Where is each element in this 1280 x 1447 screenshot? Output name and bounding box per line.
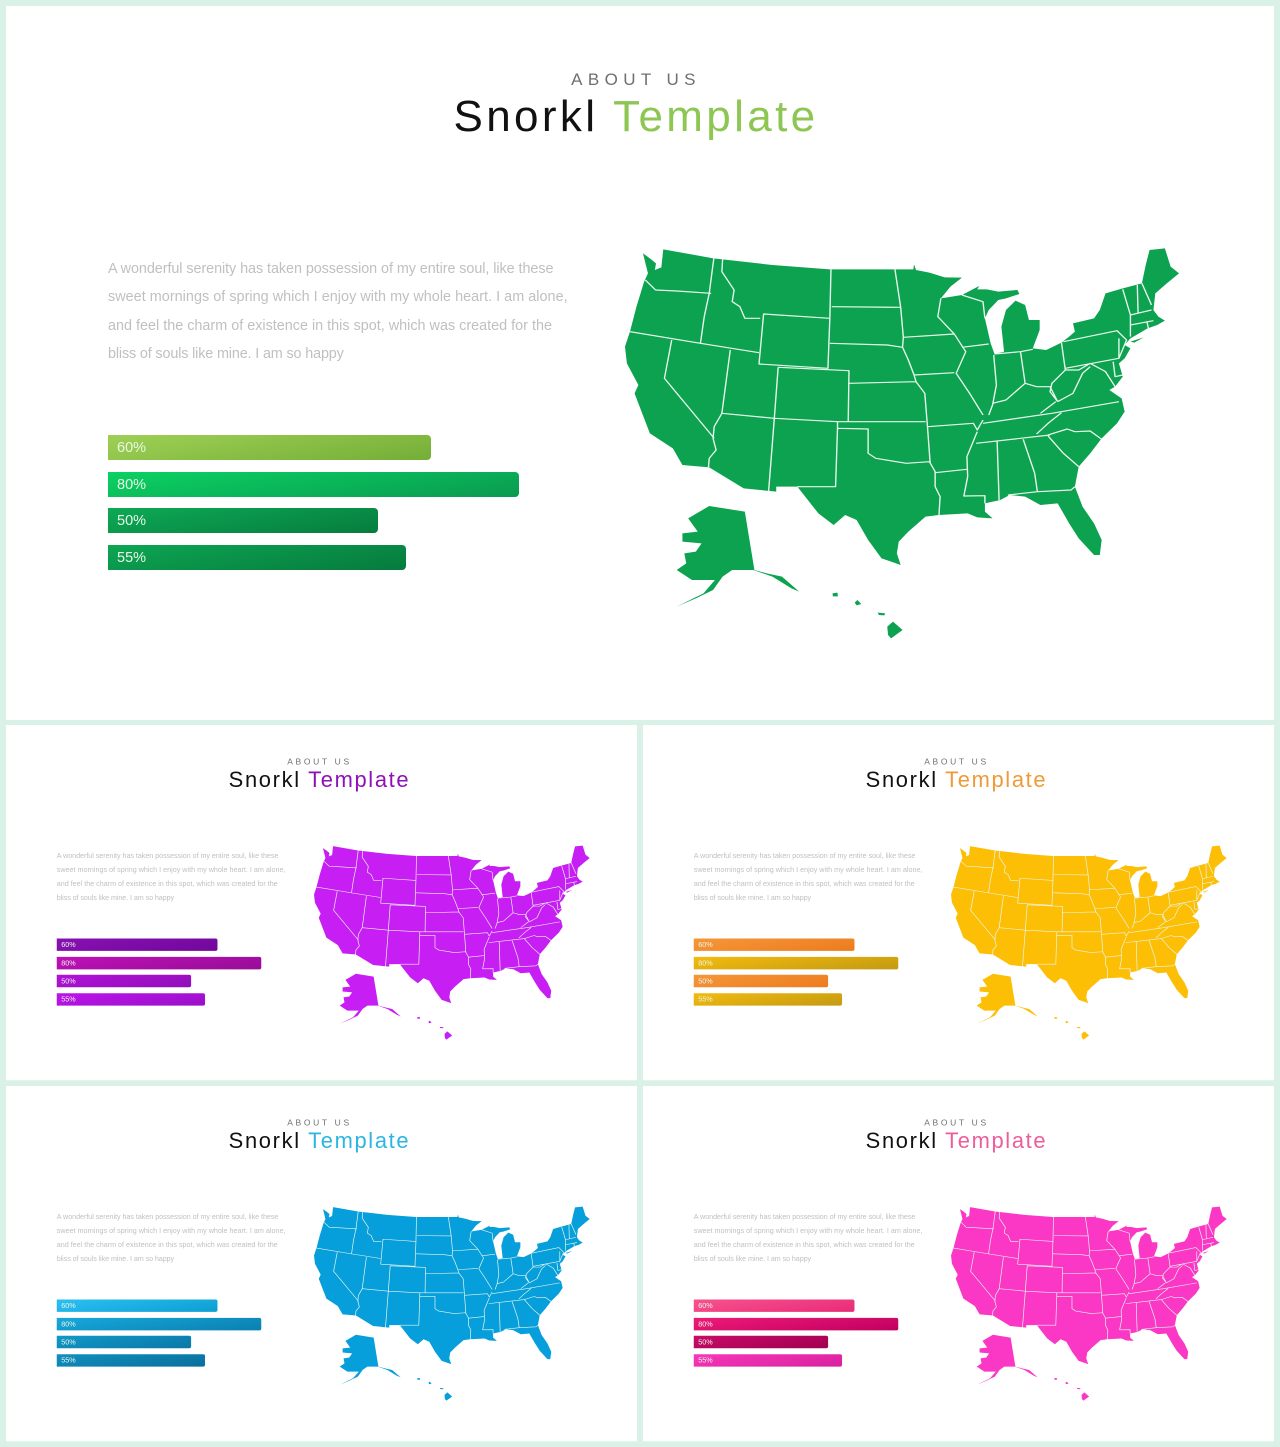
heading: pink slide: ABOUT US	[924, 1118, 989, 1127]
bar chart: blue slide: 50%	[61, 1338, 76, 1346]
map: amber USA	[951, 846, 1227, 1040]
map: purple USA	[314, 846, 590, 1040]
text block: green slide: and feel the charm of existence in this spot, which was created for the	[108, 318, 552, 334]
text block: amber slide: sweet mornings of spring which I enjoy with my whole heart. I am alone,	[694, 866, 922, 874]
bar chart: amber slide: 60%	[698, 941, 713, 949]
bar chart: purple slide: 55%	[61, 996, 76, 1004]
heading: purple slide: ABOUT US	[287, 757, 352, 766]
bar chart: pink slide: 50%	[698, 1338, 713, 1346]
panel: main green slide	[6, 6, 1274, 720]
bar chart: blue slide: 80%	[61, 1320, 76, 1328]
heading: green slide: ABOUT US	[571, 70, 701, 89]
text block: blue slide: and feel the charm of existence in this spot, which was created for the	[57, 1241, 278, 1249]
text block: purple slide: A wonderful serenity has taken possession of my entire soul, like these	[57, 852, 278, 860]
bar chart: purple slide: 80%	[61, 959, 76, 967]
bar chart: green slide: 80%	[117, 477, 146, 493]
heading: amber slide: Snorkl Template	[866, 768, 1047, 792]
text block: pink slide: A wonderful serenity has taken possession of my entire soul, like these	[694, 1213, 915, 1221]
bar chart: amber slide: 80%	[698, 959, 713, 967]
bar chart: purple slide	[56, 938, 262, 1006]
bar chart: pink slide	[694, 1300, 898, 1367]
map: blue USA	[314, 1206, 590, 1401]
text block: pink slide: bliss of souls like mine. I am so happy	[694, 1255, 811, 1263]
heading: amber slide: ABOUT US	[924, 757, 989, 766]
heading: blue slide: Snorkl Template	[229, 1129, 410, 1153]
map: green USA	[625, 248, 1179, 638]
text block: pink slide: sweet mornings of spring which I enjoy with my whole heart. I am alone,	[694, 1227, 922, 1235]
bar chart: pink slide: 60%	[698, 1302, 713, 1310]
text block: green slide: sweet mornings of spring which I enjoy with my whole heart. I am alone,	[108, 289, 568, 305]
text block: amber slide: and feel the charm of existence in this spot, which was created for the	[694, 880, 915, 888]
bar chart: green slide: 60%	[117, 440, 146, 456]
text block: green slide	[108, 261, 568, 362]
text block: blue slide: A wonderful serenity has taken possession of my entire soul, like these	[57, 1213, 278, 1221]
panel: pink slide	[643, 1086, 1274, 1441]
bar chart: blue slide: 55%	[61, 1357, 76, 1365]
text block: amber slide: bliss of souls like mine. I am so happy	[694, 894, 811, 902]
text block: purple slide	[56, 852, 285, 902]
bar chart: purple slide: 50%	[61, 977, 76, 985]
heading: pink slide	[866, 1118, 1047, 1153]
text block: blue slide: bliss of souls like mine. I am so happy	[57, 1255, 174, 1263]
map: pink USA	[951, 1206, 1227, 1401]
text block: purple slide: and feel the charm of existence in this spot, which was created for the	[57, 880, 278, 888]
bar chart: pink slide: 80%	[698, 1320, 713, 1328]
text block: amber slide	[694, 852, 922, 902]
bar chart: green slide	[108, 435, 519, 570]
text block: purple slide: sweet mornings of spring which I enjoy with my whole heart. I am alone,	[57, 866, 285, 874]
text block: green slide: A wonderful serenity has taken possession of my entire soul, like these	[108, 261, 553, 277]
heading: blue slide: ABOUT US	[287, 1118, 352, 1127]
text block: pink slide: and feel the charm of existence in this spot, which was created for the	[694, 1241, 915, 1249]
bar chart: blue slide: 60%	[61, 1302, 76, 1310]
heading: purple slide	[229, 757, 410, 792]
heading: blue slide	[229, 1118, 410, 1153]
panel: amber slide	[643, 725, 1274, 1080]
heading: purple slide: Snorkl Template	[229, 768, 410, 792]
bar chart: purple slide: 60%	[61, 941, 76, 949]
bar chart: amber slide: 50%	[698, 977, 713, 985]
heading: pink slide: Snorkl Template	[866, 1129, 1047, 1153]
heading: amber slide	[866, 757, 1047, 792]
text block: purple slide: bliss of souls like mine. I am so happy	[57, 894, 174, 902]
heading: green slide: Snorkl Template	[454, 92, 818, 141]
bar chart: green slide: 50%	[117, 513, 146, 529]
text block: amber slide: A wonderful serenity has taken possession of my entire soul, like these	[694, 852, 915, 860]
bar chart: blue slide	[56, 1300, 262, 1367]
bar chart: amber slide: 55%	[698, 996, 713, 1004]
panel: purple slide	[6, 725, 637, 1080]
bar chart: green slide: 55%	[117, 550, 146, 566]
text block: pink slide	[694, 1213, 922, 1263]
text block: green slide: bliss of souls like mine. I am so happy	[108, 346, 344, 362]
text block: blue slide: sweet mornings of spring which I enjoy with my whole heart. I am alone,	[57, 1227, 285, 1235]
heading: green slide	[454, 70, 818, 141]
panel: blue slide	[6, 1086, 637, 1441]
text block: blue slide	[56, 1213, 285, 1263]
bar chart: amber slide	[694, 938, 898, 1006]
bar chart: pink slide: 55%	[698, 1357, 713, 1365]
